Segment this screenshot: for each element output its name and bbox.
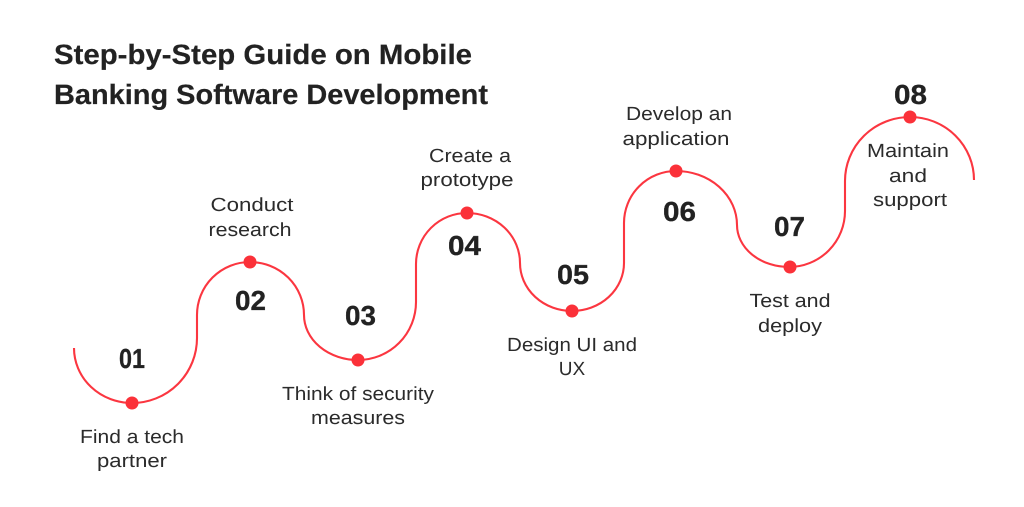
step 02: research xyxy=(208,220,292,241)
step 03: 03 xyxy=(345,300,376,331)
step 03: measures xyxy=(311,408,405,429)
step 06: application xyxy=(622,129,730,150)
step 04: prototype xyxy=(420,170,514,191)
step 03: Think of security xyxy=(282,384,435,405)
step 04 xyxy=(420,146,514,261)
step 07 xyxy=(750,211,830,337)
step 01: partner xyxy=(97,451,168,472)
step 03 xyxy=(282,300,435,429)
step 07: Test and xyxy=(750,291,830,312)
step 01: Find a tech xyxy=(80,427,184,448)
title: Banking Software Development xyxy=(54,79,488,110)
step 05 xyxy=(507,259,637,380)
step 05: UX xyxy=(559,359,586,380)
title: Step-by-Step Guide on Mobile xyxy=(54,39,472,70)
step 01: 01 xyxy=(119,343,145,374)
step 02 xyxy=(208,195,294,316)
step 05: Design UI and xyxy=(507,335,637,356)
step 04: 04 xyxy=(448,230,482,261)
step 08 xyxy=(867,79,949,211)
step 07: 07 xyxy=(774,211,805,242)
step 07: deploy xyxy=(758,316,823,337)
step 06 xyxy=(622,104,732,227)
step 04: Create a xyxy=(429,146,511,167)
step 06: 06 xyxy=(663,196,696,227)
step 08: 08 xyxy=(894,79,927,110)
step 02: Conduct xyxy=(210,195,294,216)
step 08: support xyxy=(873,190,948,211)
step 01 xyxy=(80,343,184,472)
step 06: Develop an xyxy=(626,104,732,125)
step 08: Maintain xyxy=(867,141,949,162)
title xyxy=(54,39,488,110)
step 05: 05 xyxy=(557,259,589,290)
step 02: 02 xyxy=(235,285,266,316)
wavy red timeline xyxy=(74,117,974,403)
step 08: and xyxy=(889,166,927,187)
